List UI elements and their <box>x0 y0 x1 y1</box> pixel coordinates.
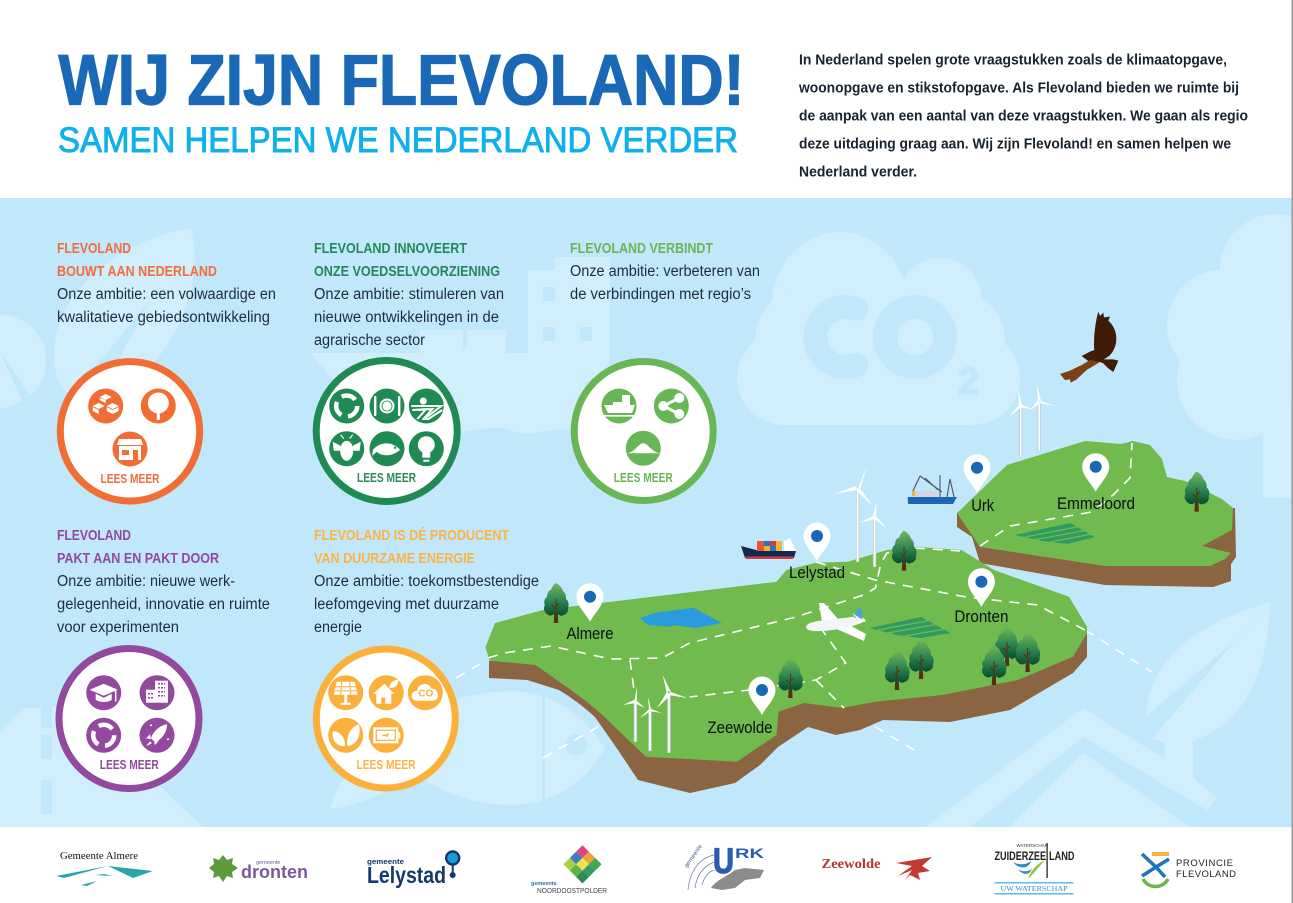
panel: verbindt text <box>570 240 760 303</box>
fishing ship <box>908 475 957 504</box>
container ship <box>741 538 796 559</box>
pin: Urk: Urk <box>971 497 995 515</box>
panel: pakt aan text: voor experimenten <box>57 619 179 636</box>
plane <box>806 603 866 641</box>
logo: Lelystad: gemeente <box>367 857 404 866</box>
intro text: In Nederland spelen grote vraagstukken zoals de klimaatopgave, <box>799 52 1227 68</box>
panel: bouwt aan Nederland text: BOUWT AAN NEDERLAND <box>57 263 217 280</box>
footer background <box>0 827 1293 903</box>
logo: Zuiderzeeland <box>994 843 1074 895</box>
wind turbines <box>623 384 1055 753</box>
logo: Dronten: dronten <box>241 862 308 882</box>
panel: voedselvoorziening text: FLEVOLAND INNOVEERT <box>314 240 467 257</box>
intro text: deze uitdaging graag aan. Wij zijn Flevoland! en samen helpen we <box>799 136 1231 152</box>
logo: Provincie Flevoland: FLEVOLAND <box>1176 869 1236 880</box>
background: CO2 cloud: 2 <box>958 361 979 403</box>
background: tree right <box>1167 214 1293 498</box>
pin: Zeewolde <box>708 676 776 737</box>
logo: Lelystad: Lelystad <box>367 862 446 888</box>
panel: verbindt text: Onze ambitie: verbeteren van <box>570 263 760 280</box>
panel: verbindt text: de verbindingen met regio’s <box>570 286 751 303</box>
panel: bouwt aan Nederland text: Onze ambitie: een volwaardige en <box>57 286 276 303</box>
badge: amber: CO <box>418 689 434 700</box>
panel: verbindt text: FLEVOLAND VERBINDT <box>570 240 713 257</box>
panel: pakt aan text: PAKT AAN EN PAKT DOOR <box>57 550 219 567</box>
lake <box>640 608 722 628</box>
panel: pakt aan text: FLEVOLAND <box>57 527 131 544</box>
logo: Almere <box>56 850 153 886</box>
pin: Almere: Almere <box>566 625 614 643</box>
background: leaves top left <box>0 228 194 408</box>
subtitle: SAMEN HELPEN WE NEDERLAND VERDER <box>58 121 738 160</box>
badge: dark green <box>316 360 457 502</box>
logo: Zuiderzeeland: LAND <box>1049 851 1074 863</box>
badge: amber: LEES MEER <box>356 757 416 772</box>
right edge line <box>1292 0 1293 903</box>
bird <box>1060 312 1118 383</box>
badge: orange: LEES MEER <box>100 471 160 486</box>
panel: duurzame energie text <box>314 527 539 636</box>
panel: voedselvoorziening text <box>314 240 504 349</box>
logo: Zeewolde <box>822 856 932 880</box>
badge: purple <box>59 648 199 788</box>
logo: Provincie Flevoland <box>1142 852 1236 886</box>
badge: light green <box>574 362 713 500</box>
logo: Urk: RK <box>735 845 764 861</box>
intro text: Nederland verder. <box>799 164 917 180</box>
panel: pakt aan text: gelegenheid, innovatie en ruimte <box>57 596 270 613</box>
field <box>1015 523 1095 544</box>
logo: Urk <box>684 842 764 890</box>
panel: voedselvoorziening text: Onze ambitie: stimuleren van <box>314 286 504 303</box>
pin: Emmeloord: Emmeloord <box>1057 495 1135 513</box>
pin: Dronten <box>954 568 1008 626</box>
logo: Noordoostpolder: NOORDOOSTPOLDER <box>537 886 608 895</box>
pin: Emmeloord <box>1057 453 1135 513</box>
panel: voedselvoorziening text: ONZE VOEDSELVOORZIENING <box>314 263 500 280</box>
logo: Noordoostpolder: gemeente <box>531 881 557 887</box>
panel: duurzame energie text: VAN DUURZAME ENERGIE <box>314 550 475 567</box>
pin: Urk <box>964 454 995 515</box>
pin: Almere <box>566 583 614 643</box>
panel: pakt aan text <box>57 527 270 636</box>
header background <box>0 0 1293 198</box>
trees <box>544 472 1209 698</box>
field <box>870 617 950 638</box>
badge: purple: LEES MEER <box>100 757 159 772</box>
panel: duurzame energie text: FLEVOLAND IS DÉ PRODUCENT <box>314 527 509 544</box>
logo: Provincie Flevoland: PROVINCIE <box>1176 858 1233 869</box>
logo: Urk: U <box>713 842 734 881</box>
panel: duurzame energie text: energie <box>314 619 362 636</box>
background: house left <box>0 706 203 827</box>
roads <box>488 548 1085 708</box>
logo: Urk: gemeente <box>684 843 704 869</box>
panel: bouwt aan Nederland text <box>57 240 276 326</box>
title: WIJ ZIJN FLEVOLAND! <box>58 42 744 120</box>
logo: Dronten <box>209 855 308 882</box>
badge: dark green: LEES MEER <box>357 470 416 485</box>
panel: bouwt aan Nederland text: kwalitatieve gebiedsontwikkeling <box>57 309 270 326</box>
pin: Lelystad: Lelystad <box>789 564 845 582</box>
panel: voedselvoorziening text: agrarische sector <box>314 332 425 349</box>
logo: Zuiderzeeland: UW WATERSCHAP <box>1000 885 1068 893</box>
logo: Zuiderzeeland: WATERSCHAP <box>1016 843 1048 848</box>
pin: Lelystad <box>789 522 845 582</box>
background: leaf and roof right <box>925 602 1270 827</box>
logo: Zeewolde: Zeewolde <box>822 856 880 871</box>
dashed routes over water <box>456 630 1152 758</box>
badge: orange <box>60 362 200 501</box>
logo: Noordoostpolder <box>531 845 608 895</box>
badge: amber <box>316 649 455 788</box>
panel: pakt aan text: Onze ambitie: nieuwe werk- <box>57 573 235 590</box>
background: CO2 cloud <box>737 232 1020 425</box>
pin: Dronten: Dronten <box>954 608 1008 626</box>
background: ship and building <box>310 257 610 434</box>
map: right island <box>957 441 1236 587</box>
badge: light green: LEES MEER <box>614 470 673 485</box>
logo: Zuiderzeeland: ZUIDERZEE <box>994 851 1046 863</box>
intro text <box>798 52 1248 180</box>
blue panel <box>0 198 1293 827</box>
pin: Zeewolde: Zeewolde <box>708 719 772 737</box>
intro text: woonopgave en stikstofopgave. Als Flevoland bieden we ruimte bij <box>798 80 1239 96</box>
background: fish <box>330 691 605 809</box>
logo: Almere: Gemeente Almere <box>60 850 138 862</box>
intro text: de aanpak van een aantal van deze vraagstukken. We gaan als regio <box>799 108 1248 124</box>
panel: duurzame energie text: Onze ambitie: toekomstbestendige <box>314 573 539 590</box>
panel: bouwt aan Nederland text: FLEVOLAND <box>57 240 131 257</box>
map: main island <box>486 547 1087 793</box>
panel: duurzame energie text: leefomgeving met duurzame <box>314 596 499 613</box>
logo: Dronten: gemeente <box>256 860 280 866</box>
panel: voedselvoorziening text: nieuwe ontwikkelingen in de <box>314 309 499 326</box>
